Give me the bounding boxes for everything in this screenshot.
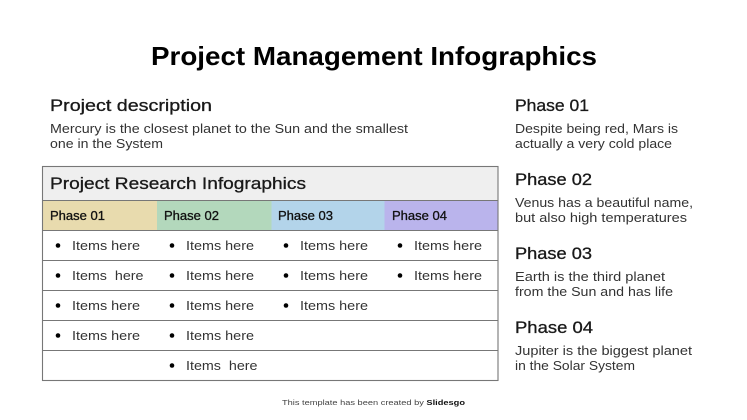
table: project research (42, 166, 498, 380)
table header: phase 04: Phase 04 (392, 209, 447, 223)
phase 02 description: Venus has a beautiful name, (515, 196, 693, 210)
phase 03 description: Earth is the third planet (515, 270, 666, 284)
table items: phase 04 column: Items here (414, 269, 482, 283)
title: Project Management Infographics (151, 41, 597, 71)
table items: phase 03 column: Items here (300, 299, 368, 313)
table items: phase 03 column: Items here (300, 239, 368, 253)
table items: phase 02 column: Items here (186, 239, 254, 253)
table header: phase 02 (157, 200, 272, 230)
table items: phase 02 column: Items here (186, 299, 254, 313)
phase 03 description: Phase 03 (515, 245, 592, 263)
table header: phase 03 (272, 200, 384, 230)
table items: phase 04 column: Items here (414, 239, 482, 253)
table items: phase 01 column: Items here (72, 299, 140, 313)
table header: phase 01 (43, 200, 157, 230)
project description block (50, 97, 409, 151)
project description text: Mercury is the closest planet to the Sun and the smallest (50, 122, 409, 136)
phase 01 description: Phase 01 (515, 97, 589, 115)
table title row (43, 167, 498, 200)
table items: phase 02 column: Items here (186, 359, 258, 373)
table items: phase 01 column (56, 239, 144, 343)
table items: phase 01 column: Items here (72, 269, 144, 283)
phase 02 description (515, 171, 693, 225)
phase 01 description: Despite being red, Mars is (515, 122, 678, 136)
project description text: one in the System (50, 137, 163, 151)
table items: phase 03 column: Items here (300, 269, 368, 283)
phase 04 description: Jupiter is the biggest planet (515, 344, 693, 358)
project description text (50, 122, 409, 151)
table items: phase 01 column: Items here (72, 329, 140, 343)
phase 03 description: from the Sun and has life (515, 285, 673, 299)
table items: phase 03 column (284, 239, 368, 313)
table title row: Project Research Infographics (50, 175, 306, 193)
footer credit: This template has been created by Slidesgo (282, 398, 466, 407)
table items: phase 02 column: Items here (186, 269, 254, 283)
project description heading: Project description (50, 97, 212, 115)
table items: phase 04 column (398, 239, 482, 283)
phase 04 description: Phase 04 (515, 319, 593, 337)
table header: phase 03: Phase 03 (278, 209, 333, 223)
phase 04 description: in the Solar System (515, 359, 635, 373)
phase 02 description: but also high temperatures (515, 211, 687, 225)
phase 01 description: actually a very cold place (515, 137, 672, 151)
table header: phase 02: Phase 02 (164, 209, 219, 223)
table header: phase 04 (384, 200, 498, 230)
phase 02 description: Phase 02 (515, 171, 592, 189)
table header: phase 01: Phase 01 (50, 209, 105, 223)
phase 01 description (515, 97, 678, 151)
phase 03 description (515, 245, 673, 299)
phase 04 description (515, 319, 693, 373)
table items: phase 01 column: Items here (72, 239, 140, 253)
table items: phase 02 column: Items here (186, 329, 254, 343)
table items: phase 02 column (170, 239, 258, 373)
